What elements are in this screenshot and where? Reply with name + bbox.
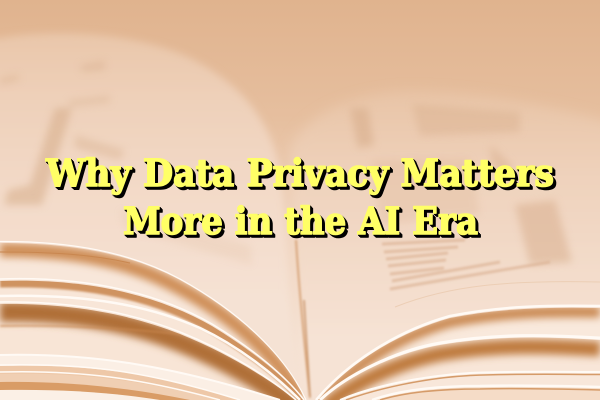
right band 4 [372, 386, 600, 400]
title line 1: Why Data Privacy Matters [45, 151, 554, 195]
right band 3 [340, 372, 600, 400]
right white page edges [316, 306, 600, 400]
right band 2 [310, 335, 600, 400]
left band 4 [0, 355, 280, 400]
left book page [0, 34, 300, 400]
right band 1 [318, 308, 600, 400]
left page stack [0, 240, 310, 400]
right band shadow lines [346, 374, 600, 400]
small blurred text lines near bottom of right page [382, 240, 550, 289]
faint ruled line on right page [395, 282, 600, 307]
title line 2: More in the AI Era [123, 199, 478, 243]
right page stack [310, 300, 600, 400]
book spine [296, 240, 310, 398]
blurred text on left page [0, 60, 252, 265]
left band 3 [0, 300, 310, 400]
right book page [290, 92, 600, 400]
left band 2 [0, 278, 310, 400]
title [45, 151, 554, 243]
left band 1 [0, 240, 310, 400]
blurred text on right page [350, 104, 572, 265]
left white page edges [0, 241, 306, 400]
